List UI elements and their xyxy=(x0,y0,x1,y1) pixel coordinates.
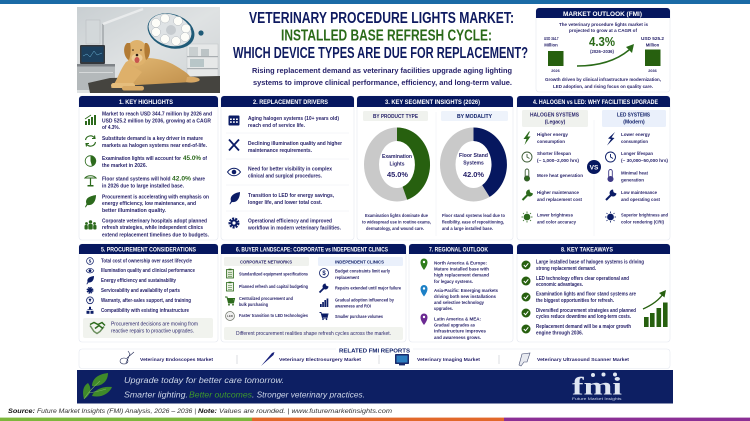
LED column: Low maintenance xyxy=(621,190,657,195)
bar: 2026 value: 2026 xyxy=(551,69,560,73)
highlight: procurement xyxy=(102,194,209,214)
highlight: market size xyxy=(102,112,212,131)
callout: proactive upgrades xyxy=(83,318,213,338)
logo: fmi: Future Market Insights xyxy=(572,396,622,401)
LED column: (~ 30,000–50,000 hrs) xyxy=(621,158,669,163)
region: Latin America and MEA: and awareness grows. xyxy=(434,335,481,340)
icon: crossed tools xyxy=(229,140,239,150)
CAGR figure xyxy=(589,34,615,54)
highlight: examination lights xyxy=(102,155,207,169)
title: INSTALLED BASE REFRESH CYCLE: xyxy=(281,28,492,44)
panel: market outlook: MARKET OUTLOOK (FMI) xyxy=(563,12,642,18)
panel: market outlook xyxy=(536,8,670,92)
takeaways list: strong replacement demand. xyxy=(536,266,597,272)
growth chart icon xyxy=(643,290,668,327)
logo: fmi xyxy=(572,372,622,401)
takeaways list: cycles reduce downtime and long-term costs. xyxy=(536,314,632,320)
column: corporate networks: LED xyxy=(227,314,234,318)
subtitle: Rising replacement demand as veterinary facilities upgrade aging lighting xyxy=(252,66,512,75)
region: Asia-Pacific: upgrades. xyxy=(434,306,453,311)
highlight: examination lights: 45.0% xyxy=(183,155,202,162)
region: Asia-Pacific: driving both new installations xyxy=(434,294,496,299)
icon: floor lamp xyxy=(85,176,96,186)
caption: product type: Examination lights dominate due xyxy=(365,213,429,218)
highlight: corporate hospitals: extend replacement timelines due to budgets. xyxy=(102,232,210,238)
column: corporate networks: Faster transition to LED technologies xyxy=(239,313,309,318)
chip: LED systems: (Modern) xyxy=(623,120,645,126)
source note: Source: xyxy=(8,409,35,415)
highlight: corporate hospitals xyxy=(102,218,210,238)
takeaways list: economic advantages. xyxy=(536,282,584,288)
region: North America and Europe: North America & Europe: xyxy=(434,261,487,266)
considerations list: Energy efficiency and sustainability xyxy=(101,278,176,284)
driver: visibility: clinical and surgical procedures. xyxy=(248,174,323,180)
panel 3: key segment insights xyxy=(357,96,513,240)
highlight: floor stand: share xyxy=(192,176,205,182)
takeaways list: LED technology offers clear operational and xyxy=(536,276,629,282)
caption: product type: to widespread use in routine exams, xyxy=(362,220,431,225)
column: independent clinics: Smaller purchase volumes xyxy=(335,314,384,319)
source note: Future Market Insights (FMI) Analysis, 2026 – 2036 | xyxy=(37,409,196,415)
subtitle xyxy=(252,66,512,87)
chip: by modality xyxy=(441,111,508,121)
highlight: substitute demand: markets as halogen systems near end-of-life. xyxy=(102,143,208,149)
donut chart: floor stand systems 42%: Systems xyxy=(463,161,484,167)
highlight: substitute demand xyxy=(102,136,208,149)
caption: modality xyxy=(442,213,505,231)
banner tagline: . Stronger veterinary practices. xyxy=(252,390,365,400)
considerations list: Illumination quality and clinical performance xyxy=(101,268,195,274)
bar: 2036 value: USD 525.2 xyxy=(641,36,665,41)
halogen column: Higher maintenance xyxy=(537,190,579,195)
title xyxy=(233,10,528,62)
icon: eye xyxy=(228,168,240,176)
donut chart: examination lights 45% xyxy=(364,127,430,202)
region: North America and Europe: for legacy systems. xyxy=(434,279,473,284)
driver: visibility: Need for better visibility in complex xyxy=(248,166,332,172)
column: independent clinics: awareness and ROI xyxy=(335,303,371,308)
bar: 2026 value: Million xyxy=(544,42,558,48)
panel 3: key segment insights: 3. KEY SEGMENT INSIGHTS (2026) xyxy=(385,100,480,106)
callout: refresh cycles xyxy=(224,327,403,340)
takeaways list: engine through 2036. xyxy=(536,330,584,336)
highlight: floor stand: Floor stand systems will hold xyxy=(102,176,170,182)
panel 1: key highlights: 1. KEY HIGHLIGHTS xyxy=(119,100,173,106)
icon: refresh arrows xyxy=(86,136,96,146)
highlight: procurement: energy efficiency, low maintenance, and xyxy=(102,201,196,207)
logo: fmi: fmi xyxy=(572,374,622,400)
driver: aging systems: reach end of service life. xyxy=(248,123,306,129)
related FMI reports xyxy=(79,346,670,368)
takeaway check icons xyxy=(522,260,530,334)
panel 1: key highlights xyxy=(79,96,218,240)
title: VETERINARY PROCEDURE LIGHTS MARKET: xyxy=(249,10,514,27)
report: endoscopes: Veterinary Endoscopes Market xyxy=(140,357,214,362)
highlight: substitute demand: Substitute demand is a key driver in mature xyxy=(102,136,203,142)
driver: aging systems xyxy=(248,116,339,129)
chip: by product type: BY PRODUCT TYPE xyxy=(373,114,419,120)
report: ultrasound: Veterinary Ultrasound Scanner Market xyxy=(537,357,630,362)
column: corporate networks: bulk purchasing xyxy=(239,302,268,307)
driver: LED transition: longer life, and lower total cost. xyxy=(248,200,323,206)
panel: market outlook: Growth driven by clinical infrastructure modernization, xyxy=(545,77,661,82)
driver: LED transition: Transition to LED for energy savings, xyxy=(248,193,335,199)
considerations list: Warranty, after-sales support, and training xyxy=(101,298,191,304)
chip: halogen systems: (Legacy) xyxy=(545,120,566,126)
driver: LED transition xyxy=(248,193,335,206)
driver: efficiency: Operational efficiency and improved xyxy=(248,218,332,224)
LED column: generation xyxy=(621,178,644,182)
column: independent clinics: Repairs extended until major failure xyxy=(335,286,402,291)
panel 2: replacement drivers xyxy=(221,96,354,240)
region: North America and Europe: Mature installed base with xyxy=(434,267,489,272)
panel: market outlook: projected to grow at a CAGR of xyxy=(569,28,638,33)
callout: proactive upgrades: reactive repairs to proactive upgrades. xyxy=(111,328,194,334)
VS badge xyxy=(587,160,601,174)
source note: Note: xyxy=(198,409,217,415)
driver: declining quality: maintenance requirements. xyxy=(248,148,313,154)
banner xyxy=(77,370,673,404)
subtitle: systems to improve clinical performance, efficiency, and long-term value. xyxy=(253,78,512,87)
highlight: procurement: Procurement is accelerating with emphasis on xyxy=(102,194,209,200)
icon: leaf xyxy=(85,195,96,208)
column: corporate networks: Planned refresh and capital budgeting xyxy=(239,284,308,289)
icon: calendar xyxy=(228,116,240,126)
LED column: Longer lifespan xyxy=(621,151,653,156)
driver: visibility xyxy=(248,166,332,180)
halogen column: Higher energy xyxy=(537,132,569,137)
chip: halogen systems: HALOGEN SYSTEMS xyxy=(530,112,580,118)
bar: 2036 value: 2036 xyxy=(648,69,657,73)
takeaways list: Replacement demand will be a major growth xyxy=(536,324,631,330)
column: corporate networks: Standardized equipment specifications xyxy=(239,272,309,277)
region: Latin America and MEA: Latin America & MEA: xyxy=(434,316,482,322)
halogen column: and color accuracy xyxy=(537,220,576,224)
chip: LED systems xyxy=(602,110,666,127)
caption: modality: flexibility, ease of repositioning, xyxy=(442,220,504,225)
CAGR figure: (2026–2036) xyxy=(590,49,614,54)
panel 6: buyer landscape xyxy=(221,244,406,342)
highlight: market size: USD 525.2 million by 2036, growing at a CAGR xyxy=(102,118,211,124)
highlight: floor stand: in 2026 due to large installed base. xyxy=(102,183,185,189)
LED column: and operating cost xyxy=(621,197,660,202)
considerations list: Serviceability and availability of parts xyxy=(101,288,180,294)
LED column: consumption xyxy=(621,139,648,144)
bar: 2036 value xyxy=(641,36,665,73)
icon group: considerations: $ xyxy=(89,259,92,264)
region: Latin America and MEA: infrastructure improves xyxy=(434,328,487,334)
takeaways list: the biggest opportunities for refresh. xyxy=(536,298,615,304)
region: Asia-Pacific: Asia-Pacific: Emerging markets xyxy=(434,288,498,293)
chip: by modality: BY MODALITY xyxy=(457,114,493,120)
caption: product type: dermatology, and wound care. xyxy=(366,226,424,231)
highlight: examination lights: Examination lights will account for xyxy=(102,156,181,162)
bar: 2026 value: USD 344.7 xyxy=(544,36,559,41)
title: WHICH DEVICE TYPES ARE DUE FOR REPLACEMENT? xyxy=(233,45,528,62)
region: North America and Europe xyxy=(420,258,489,284)
chip: by product type xyxy=(363,111,428,121)
LED column: color rendering (CRI) xyxy=(621,220,664,224)
caption: product type xyxy=(362,213,431,231)
photo: golden retriever on veterinary table under procedure light xyxy=(77,7,220,93)
icon: gear xyxy=(230,219,238,227)
driver: efficiency: workflow in modern veterinary facilities. xyxy=(247,226,342,232)
banner tagline: Smarter lighting. xyxy=(124,390,188,400)
LED column xyxy=(605,132,669,224)
column: corporate networks xyxy=(224,257,309,320)
driver: declining quality: Declining illumination quality and higher xyxy=(248,141,342,147)
CAGR figure: 4.3% xyxy=(589,34,615,49)
column: independent clinics: replacement xyxy=(335,275,360,280)
report: imaging: Veterinary Imaging Market xyxy=(417,357,481,362)
panel 7: regional outlook: 7. REGIONAL OUTLOOK xyxy=(429,248,489,254)
region: Asia-Pacific: and selective technology xyxy=(434,300,484,305)
highlight: corporate hospitals: Corporate veterinary hospitals adopt planned xyxy=(102,218,207,224)
bottom colour bar xyxy=(0,418,750,421)
column: independent clinics: Budget constraints limit early xyxy=(335,269,391,274)
region: Asia-Pacific xyxy=(420,285,498,311)
column: corporate networks: CORPORATE NETWORKS xyxy=(240,260,292,264)
highlight: corporate hospitals: refresh strategies, while independent clinics xyxy=(102,225,203,231)
report: electrosurgery: Veterinary Electrosurgery Market xyxy=(279,357,362,362)
takeaways list: Examination lights and floor stand systems are xyxy=(536,292,636,298)
halogen column: and replacement cost xyxy=(537,197,582,202)
chip: halogen systems xyxy=(522,110,588,127)
icon: bar chart xyxy=(85,115,96,125)
banner tagline xyxy=(124,376,365,400)
panel 7: regional outlook xyxy=(409,244,513,342)
highlight: floor stand xyxy=(102,176,205,189)
donut chart: examination lights 45%: 45.0% xyxy=(387,172,409,179)
panel: market outlook: The veterinary procedure lights market is xyxy=(559,22,649,27)
considerations list: Compatibility with existing infrastructure xyxy=(101,308,189,314)
panel 6: buyer landscape: 6. BUYER LANDSCAPE: CORPORATE vs INDEPENDENT CLINICS xyxy=(236,248,388,254)
column: independent clinics: INDEPENDENT CLINICS xyxy=(335,260,384,264)
highlight: examination lights: of xyxy=(202,156,207,162)
chip: LED systems: LED SYSTEMS xyxy=(617,112,651,118)
growth arrow xyxy=(577,44,634,66)
region: Latin America and MEA xyxy=(420,314,487,340)
report: electrosurgery xyxy=(261,352,362,366)
halogen column: Shorter lifespan xyxy=(537,151,571,156)
source note xyxy=(8,409,392,415)
icon: pie xyxy=(85,156,96,166)
panel 2: replacement drivers: 2. REPLACEMENT DRIVERS xyxy=(253,100,328,106)
caption: modality: Floor stand systems lead due to xyxy=(442,213,505,218)
LED column: Minimal heat xyxy=(621,170,648,176)
banner tagline: Better outcomes xyxy=(189,390,252,400)
panel 4: halogen vs LED: 4. HALOGEN vs LED: WHY FACILITIES UPGRADE xyxy=(533,100,658,106)
icon: leaf xyxy=(230,192,240,204)
highlight: floor stand: 42.0% xyxy=(172,176,192,183)
column: corporate networks: Centralized procurement and xyxy=(239,296,293,301)
considerations list xyxy=(101,258,195,314)
driver: aging systems: Aging halogen systems (10+ years old) xyxy=(248,116,339,122)
donut chart: floor stand systems 42%: 42.0% xyxy=(463,172,485,179)
takeaways list: Large installed base of halogen systems is driving xyxy=(536,260,644,266)
caption: modality: and a large installed base. xyxy=(442,226,493,231)
column: independent clinics: Gradual adoption influenced by xyxy=(335,298,395,303)
highlight: examination lights: the market in 2026. xyxy=(102,163,148,169)
related FMI reports: RELATED FMI REPORTS xyxy=(339,348,410,354)
halogen column: (~ 1,000–2,000 hrs) xyxy=(537,158,580,163)
panel 5: procurement considerations: 5. PROCUREMENT CONSIDERATIONS xyxy=(101,248,196,254)
report: endoscopes xyxy=(120,351,214,364)
region: Latin America and MEA: Gradual upgrades as xyxy=(434,322,475,328)
driver: efficiency xyxy=(247,218,342,232)
bar: 2026 value xyxy=(544,36,564,73)
icon: green leaves xyxy=(83,373,112,399)
highlight: procurement: better illumination quality. xyxy=(102,208,167,214)
halogen column: More heat generation xyxy=(537,173,583,178)
icon: people xyxy=(84,220,96,230)
considerations list: Total cost of ownership over asset lifecycle xyxy=(101,258,192,264)
report: imaging xyxy=(395,354,481,365)
panel 8: key takeaways xyxy=(517,244,670,342)
LED column: Superior brightness and xyxy=(621,212,668,218)
column: independent clinics: $ xyxy=(322,271,326,277)
callout: refresh cycles: Different procurement realities shape refresh cycles across the market. xyxy=(236,331,391,337)
highlight: market size: of 4.3%. xyxy=(102,125,121,131)
donut chart: examination lights 45%: Examination xyxy=(382,154,412,160)
donut chart: examination lights 45%: Lights xyxy=(390,162,405,168)
region: North America and Europe: high replacement demand xyxy=(434,273,489,278)
highlight: market size: Market to reach USD 344.7 million by 2026 and xyxy=(102,112,212,118)
LED column: Lower energy xyxy=(621,132,650,137)
callout: proactive upgrades: Procurement decisions are moving from xyxy=(111,322,198,328)
panel 5: procurement considerations xyxy=(79,244,218,342)
top bar xyxy=(0,0,750,4)
report: ultrasound xyxy=(519,353,630,366)
takeaways list xyxy=(536,260,644,336)
takeaways list: Diversified procurement strategies and planned xyxy=(536,308,636,314)
panel 8: key takeaways: 8. KEY TAKEAWAYS xyxy=(561,248,613,254)
panel 4: halogen vs LED xyxy=(517,96,670,240)
column: independent clinics xyxy=(318,257,403,320)
donut chart: floor stand systems 42% xyxy=(440,128,507,202)
source note: Values are rounded. | www.futuremarketinsights.com xyxy=(219,409,392,415)
halogen column: Lower brightness xyxy=(537,212,573,218)
donut chart: floor stand systems 42%: Floor Stand xyxy=(459,153,488,159)
banner tagline: Upgrade today for better care tomorrow. xyxy=(124,376,284,385)
VS badge: VS xyxy=(590,164,599,171)
halogen column xyxy=(522,132,583,224)
halogen column: consumption xyxy=(537,139,565,144)
driver: declining quality xyxy=(248,141,342,154)
panel: market outlook: LED adoption, and rising focus on quality care. xyxy=(553,84,653,89)
bar: 2036 value: Million xyxy=(646,42,660,48)
